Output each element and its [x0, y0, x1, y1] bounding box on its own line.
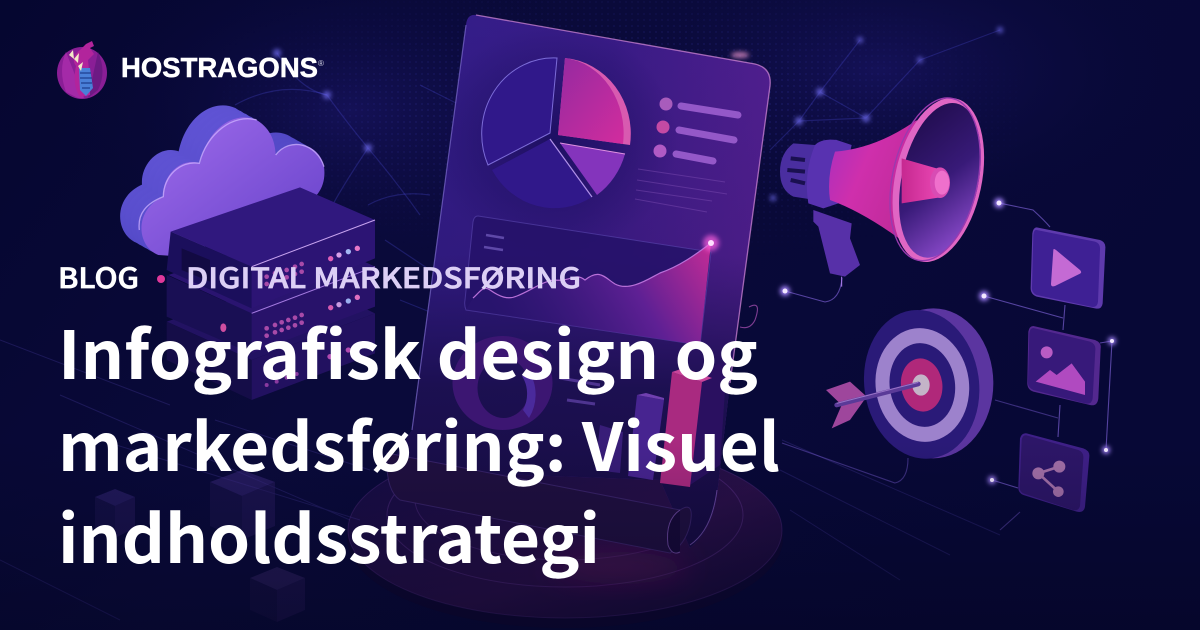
icon cards — [1018, 227, 1105, 512]
cloud — [120, 105, 324, 257]
title: markedsføring: Visuel — [58, 395, 780, 491]
bar chart — [560, 360, 727, 487]
category label: DIGITAL MARKEDSFØRING — [186, 257, 581, 297]
card: play — [1031, 227, 1105, 309]
card: share — [1018, 433, 1089, 512]
title: Infografisk design og — [58, 303, 758, 399]
pie legend — [635, 98, 738, 212]
icon: target with arrow — [826, 302, 993, 466]
icon: megaphone — [780, 89, 998, 287]
arrow — [826, 382, 918, 428]
logo — [57, 41, 324, 99]
inner rod — [902, 158, 940, 203]
card: image — [1027, 326, 1101, 405]
connector lines and glowing nodes — [740, 198, 1116, 530]
platform — [347, 440, 783, 628]
icon: cloud and server stack — [120, 105, 375, 400]
bottom-left cubes and circuit lines — [0, 340, 1000, 622]
scroll curl — [387, 453, 717, 553]
poster sheet — [387, 15, 770, 548]
collar — [807, 140, 852, 208]
top server — [167, 187, 375, 308]
handle — [813, 210, 860, 277]
title — [58, 303, 780, 583]
middle server — [167, 232, 375, 353]
bell — [876, 89, 998, 271]
bottom vignette — [0, 440, 1200, 630]
donut chart — [452, 336, 552, 430]
cone — [829, 120, 917, 247]
rear grip — [780, 143, 815, 200]
category label: BLOG — [58, 257, 139, 297]
pie chart — [482, 58, 631, 208]
icon: dragon mark — [57, 41, 107, 99]
category label — [58, 257, 581, 297]
network map lines and nodes — [235, 27, 1003, 320]
line chart panel — [465, 216, 719, 345]
report poster — [387, 15, 770, 553]
logo: ® — [318, 59, 324, 68]
wordmark: HOSTRAGONS — [121, 52, 318, 83]
title: indholdsstrategi — [58, 487, 600, 583]
bottom server — [167, 277, 375, 400]
